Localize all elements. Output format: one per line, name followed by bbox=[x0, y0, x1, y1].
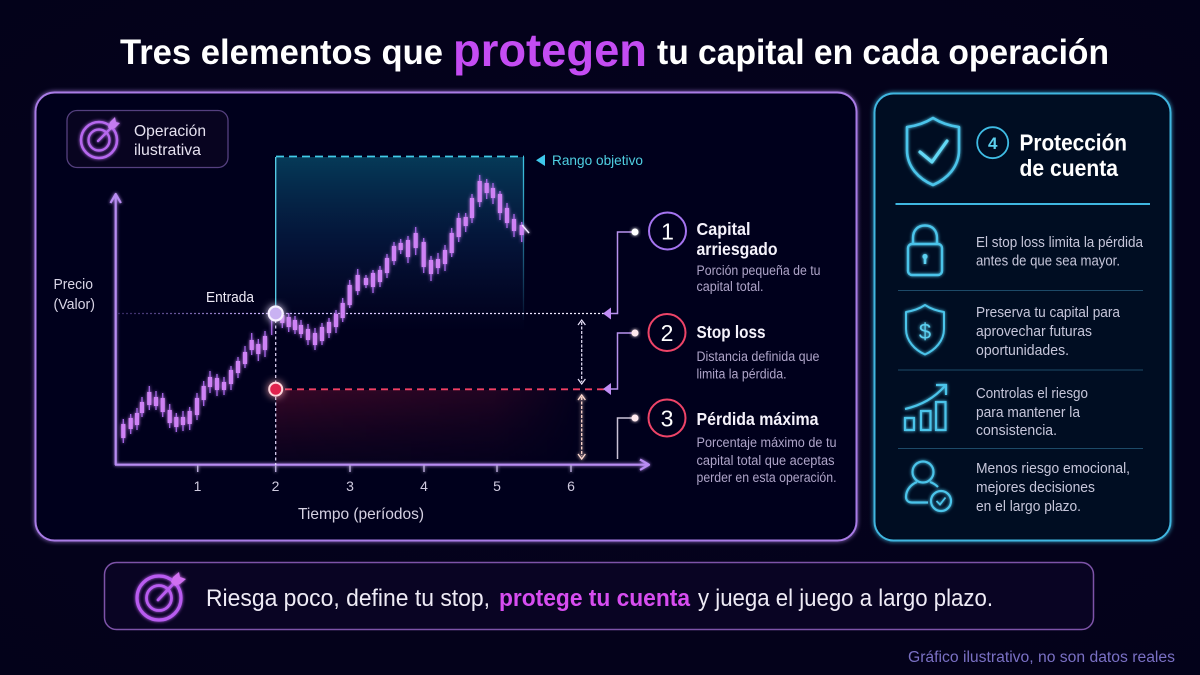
item 3: pérdida máxima: Pérdida máxima bbox=[696, 409, 819, 429]
text: stop loss limita bbox=[976, 235, 1144, 270]
text: controlas: para mantener la bbox=[976, 405, 1081, 421]
axes bbox=[110, 194, 649, 472]
item 2: stop loss: limita la pérdida. bbox=[696, 366, 786, 382]
number 4 bbox=[977, 127, 1008, 158]
item 2: stop loss: 2 bbox=[661, 320, 673, 346]
text: controlas: Controlas el riesgo bbox=[976, 386, 1088, 402]
badge: operación ilustrativa: Operación bbox=[134, 123, 206, 140]
marker: stop bbox=[269, 383, 282, 396]
icon: target bbox=[81, 117, 120, 158]
panel: operation chart bbox=[36, 92, 856, 540]
text: preserva: Preserva tu capital para bbox=[976, 305, 1121, 321]
connector 3 bbox=[618, 414, 638, 459]
double arrow: maximum loss bbox=[578, 395, 585, 459]
label: rango objetivo: Rango objetivo bbox=[552, 152, 643, 168]
axis tick labels: 6 bbox=[567, 478, 575, 494]
label: precio: (Valor) bbox=[54, 296, 95, 313]
axis tick labels: 3 bbox=[346, 478, 354, 494]
entry dotted line bbox=[118, 312, 605, 314]
text: stop loss limita: antes de que sea mayor. bbox=[976, 254, 1120, 270]
text: menos riesgo bbox=[976, 461, 1130, 515]
text: preserva bbox=[976, 305, 1121, 359]
axis tick labels: 1 bbox=[194, 478, 202, 494]
message text bbox=[206, 585, 993, 612]
item 2: stop loss bbox=[648, 314, 820, 382]
axis tick labels bbox=[194, 478, 575, 494]
badge: operación ilustrativa bbox=[67, 110, 228, 168]
candlestick series bbox=[123, 175, 529, 443]
maximum loss area bbox=[276, 390, 562, 462]
footer note: Gráfico ilustrativo, no son datos reales bbox=[908, 649, 1175, 666]
title: protegen bbox=[453, 24, 647, 76]
title bbox=[120, 24, 1109, 76]
item 3: pérdida máxima: Porcentaje máximo de tu bbox=[696, 435, 836, 450]
item 2: stop loss: Distancia definida que bbox=[696, 349, 820, 364]
axis tick labels: 4 bbox=[420, 478, 428, 494]
icon: target bbox=[137, 572, 186, 620]
text: controlas bbox=[976, 386, 1088, 439]
connector 2 bbox=[603, 330, 638, 395]
label: precio: Precio bbox=[54, 276, 93, 293]
text: stop loss limita: El stop loss limita la pérdida bbox=[976, 235, 1144, 251]
double arrow: stop distance bbox=[578, 320, 585, 384]
message text: protege tu cuenta bbox=[499, 585, 691, 612]
marker: entry bbox=[269, 306, 283, 320]
icon: dollar shield: $ bbox=[919, 319, 931, 344]
message text: y juega el juego a largo plazo. bbox=[698, 585, 993, 612]
icon: dollar shield bbox=[906, 305, 944, 354]
item 3: pérdida máxima: 3 bbox=[661, 406, 673, 432]
text: menos riesgo: mejores decisiones bbox=[976, 480, 1095, 496]
item 1: capital arriesgado: Porción pequeña de tu bbox=[696, 263, 820, 278]
text: menos riesgo: en el largo plazo. bbox=[976, 499, 1081, 515]
icon: person check bbox=[906, 462, 951, 511]
vertical dotted line bbox=[275, 320, 277, 465]
badge: operación ilustrativa: ilustrativa bbox=[134, 142, 201, 159]
connector 1 bbox=[603, 228, 638, 320]
number 4: 4 bbox=[988, 134, 998, 153]
item 1: capital arriesgado: Capital bbox=[696, 219, 750, 239]
label: entrada: Entrada bbox=[206, 290, 255, 306]
message text: Riesga poco, define tu stop, bbox=[206, 585, 490, 612]
label: precio bbox=[54, 276, 95, 313]
item 1: capital arriesgado: arriesgado bbox=[696, 239, 778, 259]
item 1: capital arriesgado bbox=[649, 212, 820, 294]
icon: lock bbox=[908, 226, 942, 275]
text: menos riesgo: Menos riesgo emocional, bbox=[976, 461, 1130, 477]
title: tu capital en cada operación bbox=[657, 33, 1109, 72]
item 1: capital arriesgado: capital total. bbox=[696, 279, 764, 294]
panel: protección de cuenta bbox=[874, 94, 1170, 540]
axis tick labels: 5 bbox=[493, 478, 501, 494]
panel heading: de cuenta bbox=[1020, 155, 1118, 181]
panel heading: Protección bbox=[1020, 130, 1127, 156]
title: Tres elementos que bbox=[120, 33, 443, 72]
label: tiempo: Tiempo (períodos) bbox=[298, 506, 424, 523]
text: preserva: aprovechar futuras bbox=[976, 324, 1092, 340]
text: controlas: consistencia. bbox=[976, 423, 1057, 439]
axis tick labels: 2 bbox=[272, 478, 280, 494]
item 3: pérdida máxima: perder en esta operación. bbox=[696, 470, 836, 485]
panel heading bbox=[1020, 130, 1127, 181]
stop dashed line bbox=[285, 388, 605, 390]
item 1: capital arriesgado: 1 bbox=[661, 218, 674, 244]
target range area bbox=[276, 156, 524, 332]
panel: bottom message bbox=[104, 562, 1094, 630]
icon: shield check bbox=[907, 118, 959, 185]
item 3: pérdida máxima: capital total que aceptas bbox=[696, 453, 835, 468]
text: preserva: oportunidades. bbox=[976, 343, 1069, 359]
icon: growth chart bbox=[905, 385, 946, 430]
item 2: stop loss: Stop loss bbox=[696, 322, 766, 342]
item 3: pérdida máxima bbox=[648, 400, 836, 485]
